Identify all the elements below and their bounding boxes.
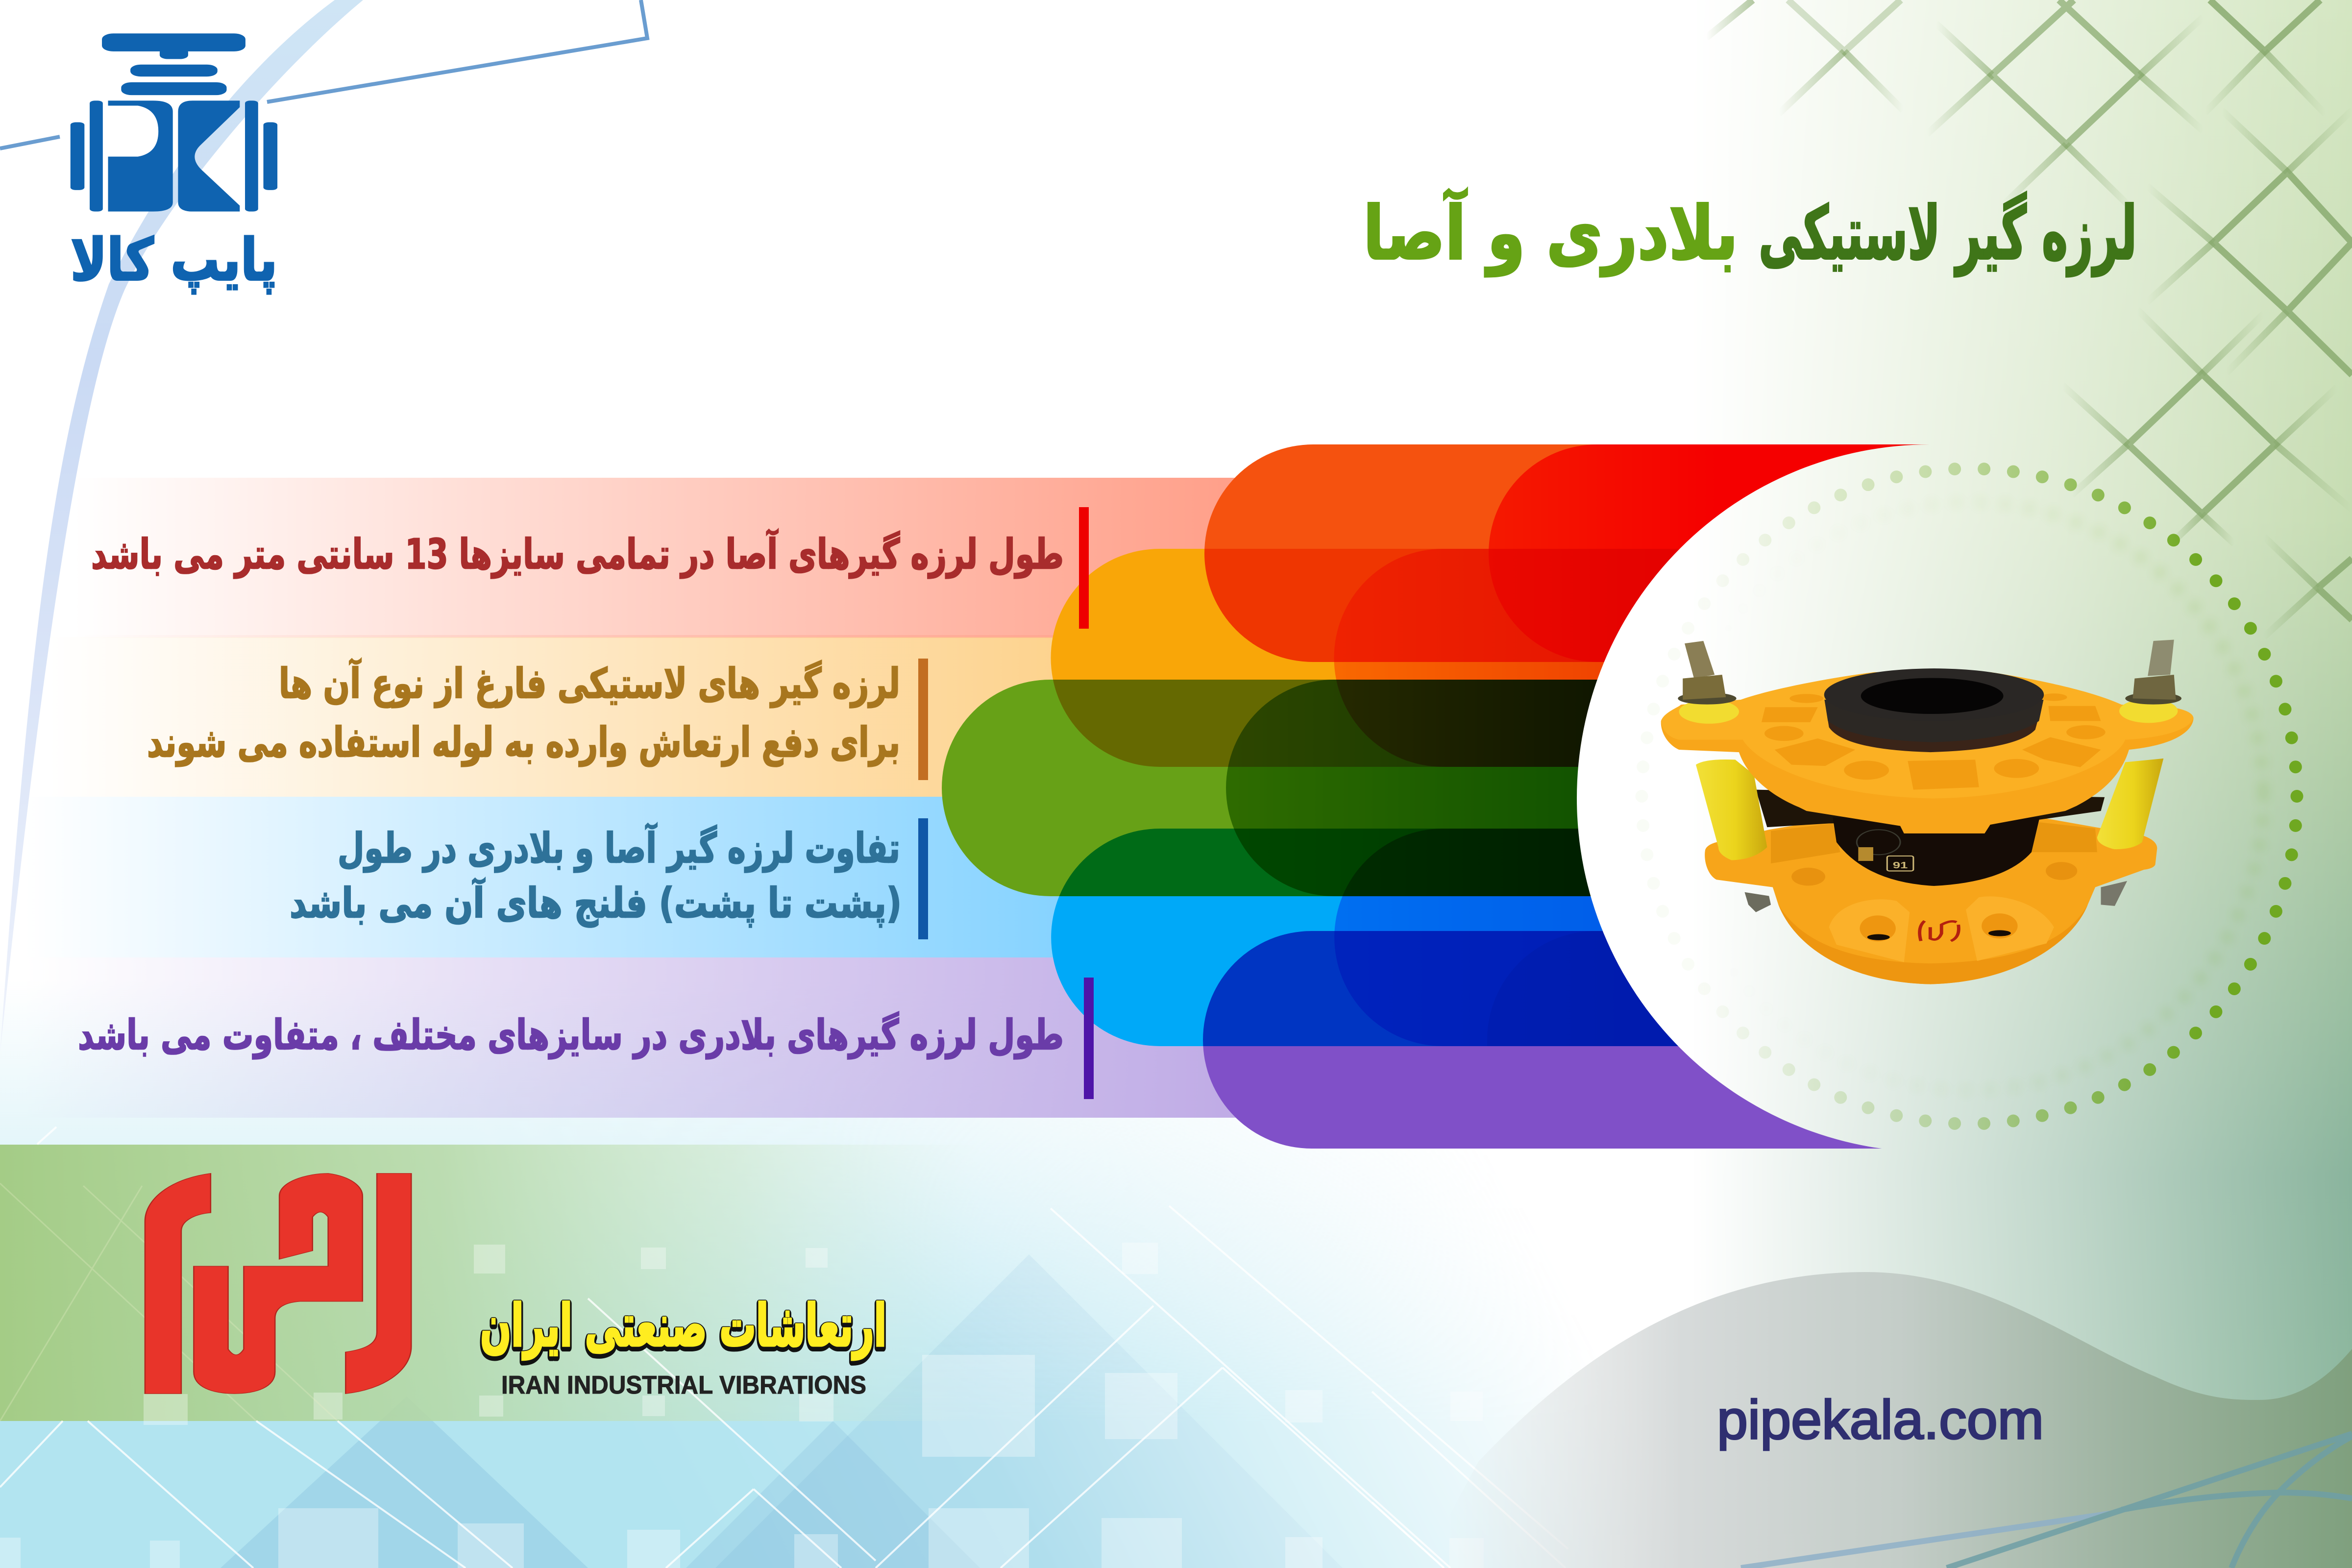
title xyxy=(1363,189,2137,277)
text: item 2 xyxy=(147,658,900,767)
background: cyan geometric field bottom left xyxy=(0,980,1666,1568)
panel: item bands xyxy=(24,478,1323,1118)
band: purple row xyxy=(24,957,1323,1118)
text: item 2: برای دفع ارتعاش وارده به لوله استفاده می شوند xyxy=(147,718,900,767)
text: item 3 xyxy=(290,823,902,928)
lower bolts xyxy=(1744,892,1771,912)
accent bar: red xyxy=(1079,507,1089,629)
left bolt, nut and bushing xyxy=(1685,641,1715,679)
logo text: persian company name xyxy=(480,1292,886,1362)
rainbow pills xyxy=(942,444,1931,1149)
background: green right-side gradient xyxy=(1740,0,2352,1400)
red maker mark xyxy=(1920,921,1959,941)
product photo: rubber expansion joint: 91 xyxy=(1893,860,1908,870)
text: item 3: تفاوت لرزه گیر آصا و بلادری در طول xyxy=(338,823,900,873)
right bolt, nut and bushing xyxy=(2148,640,2174,676)
background: blue net lines bottom right xyxy=(1741,1434,2352,1568)
website address: pipekala.com xyxy=(1717,1389,2044,1450)
accent bar: blue xyxy=(918,818,928,939)
background: diamond lattice top right xyxy=(1706,0,2352,637)
rubber collar xyxy=(1824,700,2043,752)
text: item 2: لرزه گیر های لاستیکی فارغ از نوع آن ها xyxy=(279,658,900,708)
band: red row xyxy=(74,478,1323,637)
gap shadow under upper flange xyxy=(1756,790,2105,827)
accent bar: orange xyxy=(918,659,928,780)
flange recesses xyxy=(1762,693,2106,790)
logo: iran industrial vibrations red mark xyxy=(145,1174,411,1394)
background: light blue arc left edge xyxy=(0,0,363,1054)
product photo: rubber expansion joint xyxy=(1661,640,2194,984)
logo text: english company name: IRAN INDUSTRIAL VIBRATIONS xyxy=(501,1371,866,1399)
dotted circle around the product xyxy=(1642,468,2297,1124)
background: grey wave bottom right xyxy=(1421,1272,2352,1568)
flange holes and pads xyxy=(1829,899,1910,962)
band: orange row xyxy=(49,637,1176,797)
logo: pipekala valve mark xyxy=(71,33,277,212)
logo text: persian company name: ارتعاشات صنعتی ایران xyxy=(480,1292,886,1360)
background: white triangle lines xyxy=(0,1127,1568,1568)
text: item 3: (پشت تا پشت) فلنج های آن می باشد xyxy=(290,878,902,928)
logo text: persian company name: ارتعاشات صنعتی ایران xyxy=(480,1294,886,1362)
background: green strip behind company logo xyxy=(0,1145,980,1421)
title: بلادری و آصا xyxy=(1363,189,1738,277)
logo: pipekala wordmark: پایپ کالا xyxy=(71,226,277,294)
lower flange xyxy=(1705,817,2157,984)
background: thin blue polyline top left xyxy=(0,0,647,148)
text: item 4: طول لرزه گیرهای بلادری در سایزهای مختلف ، متفاوت می باشد xyxy=(78,1011,1064,1059)
accent bar: purple xyxy=(1084,978,1094,1099)
yellow spacer cylinders xyxy=(1696,760,1767,860)
text: item 1: طول لرزه گیرهای آصا در تمامی سایزها 13 سانتی متر می باشد xyxy=(91,529,1064,579)
background: translucent squares xyxy=(0,1243,2294,1568)
rubber sphere xyxy=(1833,817,2040,886)
upper flange xyxy=(1661,672,2194,833)
band: blue row xyxy=(24,797,1176,957)
